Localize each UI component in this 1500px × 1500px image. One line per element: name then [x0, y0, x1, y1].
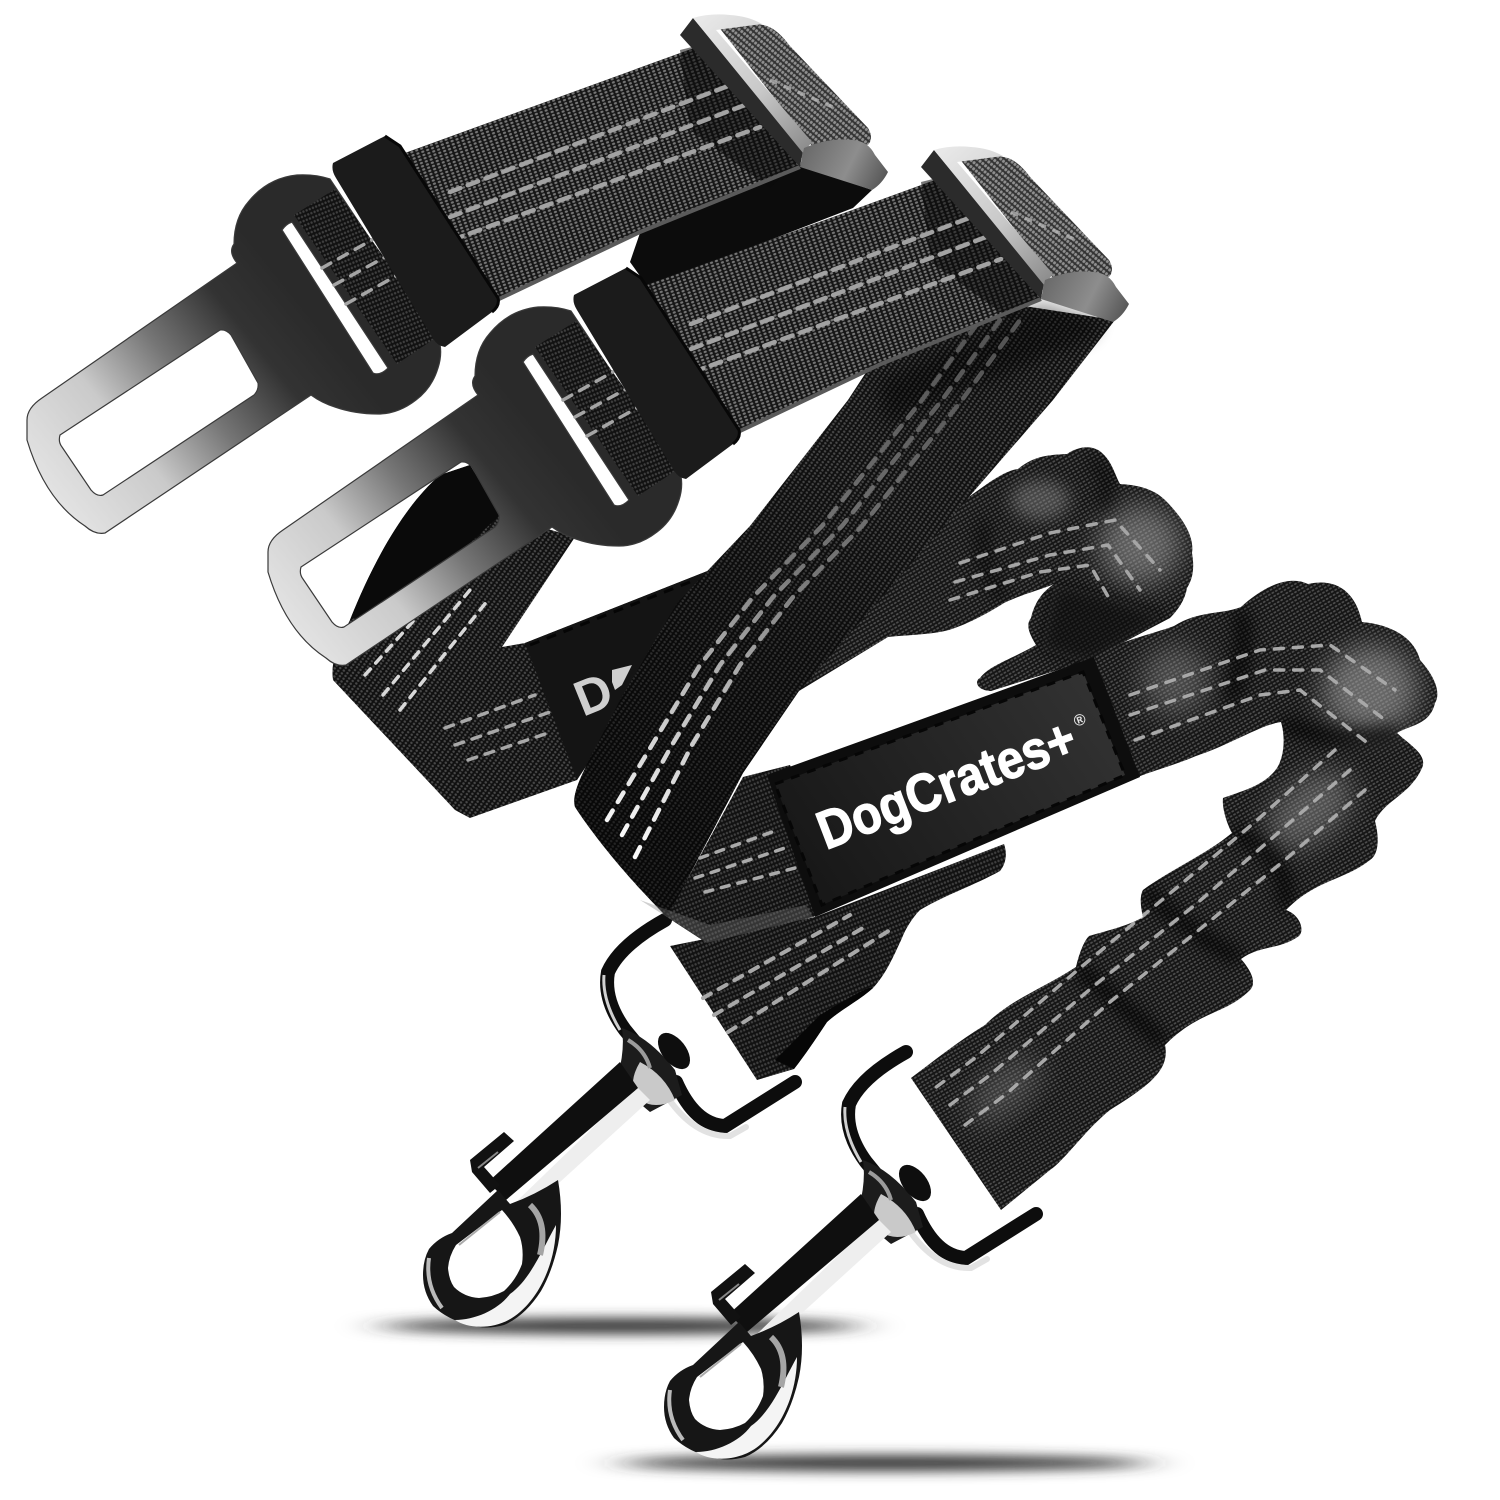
rear patch logo letter: D	[566, 662, 621, 727]
leather logo patch	[767, 657, 1140, 917]
first snap hook	[423, 920, 795, 1328]
ground shadow under first hook	[380, 1318, 860, 1334]
brand logo text: DogCrates+	[809, 708, 1084, 861]
brand logo text: ®	[1072, 711, 1089, 731]
front bungee section	[900, 560, 1450, 1220]
main diagonal strap	[574, 290, 1115, 943]
band below the patch	[640, 765, 850, 943]
rear bungee section	[670, 430, 1210, 1080]
ground shadow under second hook	[620, 1455, 1150, 1471]
rear strap strip with patch	[332, 465, 710, 818]
second snap hook	[664, 1052, 1036, 1460]
second seat belt strap and buckle	[268, 146, 1129, 665]
fold behind first strap	[630, 165, 872, 287]
first seat belt strap and buckle	[27, 14, 888, 533]
